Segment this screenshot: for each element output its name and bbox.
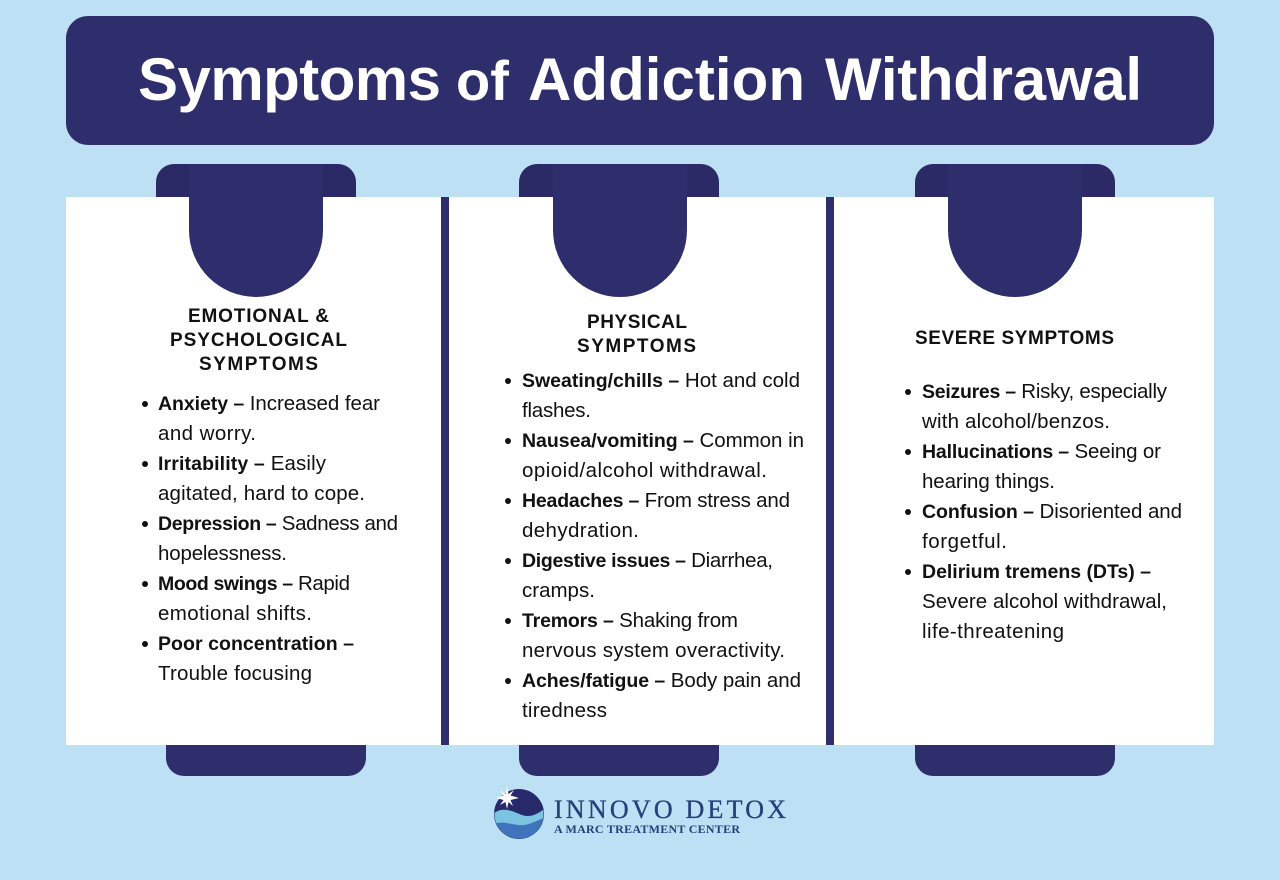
title: Withdrawal — [825, 46, 1142, 113]
item: anxiety — [142, 392, 380, 445]
item: tremors: nervous system overactivity. — [522, 639, 785, 662]
item: poor concentration — [142, 633, 354, 685]
title banner — [66, 16, 1214, 145]
item: delirium tremens: Severe alcohol withdrawal, — [922, 590, 1167, 613]
item: seizures: with alcohol/benzos. — [921, 410, 1110, 433]
item: digestive issues: cramps. — [522, 579, 595, 602]
item: delirium tremens: Delirium tremens (DTs) – — [922, 561, 1151, 583]
item: seizures — [905, 380, 1168, 433]
item: anxiety: Anxiety – Increased fear — [158, 392, 380, 415]
symptom list: emotional — [142, 392, 398, 685]
item: confusion — [905, 500, 1182, 553]
item: confusion: forgetful. — [922, 530, 1007, 553]
top tab: right — [915, 164, 1115, 197]
heading: physical symptoms: SYMPTOMS — [577, 336, 696, 357]
panel: severe symptoms — [905, 328, 1182, 643]
item: delirium tremens — [905, 561, 1167, 643]
item: mood swings — [142, 572, 350, 625]
title: Addiction — [528, 46, 805, 113]
item: sweating/chills — [505, 369, 800, 422]
heading: emotional and psychological symptoms — [170, 306, 347, 375]
top tab: middle — [519, 164, 719, 197]
item: sweating/chills: flashes. — [522, 399, 591, 422]
item: nausea/vomiting: Nausea/vomiting – Common in — [522, 429, 804, 452]
wordmark: INNOVO DETOX — [554, 795, 786, 824]
tagline: A MARC TREATMENT CENTER — [554, 822, 740, 836]
item: headaches: dehydration. — [522, 519, 639, 542]
item: aches/fatigue — [505, 669, 801, 722]
icon badge: right — [948, 164, 1082, 297]
title — [138, 46, 1142, 113]
title: Symptoms — [138, 46, 441, 113]
panel: emotional and psychological symptoms — [142, 306, 398, 685]
panel: white card background — [66, 197, 1214, 745]
heading: emotional and psychological symptoms: EMOTIONAL & — [188, 306, 329, 327]
item: poor concentration: Poor concentration – — [158, 633, 354, 655]
item: confusion: Confusion – Disoriented and — [922, 500, 1182, 523]
item: hallucinations: Hallucinations – Seeing or — [922, 440, 1161, 463]
item: irritability: Irritability – Easily — [158, 452, 327, 475]
item: seizures: Seizures – Risky, especially — [922, 380, 1168, 403]
item: poor concentration: Trouble focusing — [158, 662, 312, 685]
item: depression: hopelessness. — [158, 542, 287, 565]
item: nausea/vomiting — [505, 429, 804, 482]
panel: physical symptoms — [505, 312, 804, 722]
item: irritability: agitated, hard to cope. — [158, 482, 365, 505]
item: hallucinations: hearing things. — [922, 470, 1055, 493]
heading: emotional and psychological symptoms: PSYCHOLOGICAL — [170, 330, 347, 351]
symptom list: physical — [505, 369, 804, 722]
heading: physical symptoms: PHYSICAL — [587, 312, 687, 333]
item: headaches: Headaches – From stress and — [522, 489, 790, 512]
bottom tab: right — [915, 745, 1115, 776]
heading: physical symptoms — [577, 312, 696, 357]
item: digestive issues: Digestive issues – Diarrhea, — [522, 549, 773, 572]
icon: logo globe — [494, 786, 544, 840]
heading: emotional and psychological symptoms: SYMPTOMS — [199, 354, 318, 375]
item: delirium tremens: life-threatening — [922, 620, 1064, 643]
item: depression — [142, 512, 398, 565]
item: digestive issues — [505, 549, 773, 602]
item: aches/fatigue: tiredness — [522, 699, 607, 722]
item: sweating/chills: Sweating/chills – Hot and cold — [522, 369, 800, 392]
item: tremors — [505, 609, 785, 662]
icon badge: middle — [553, 164, 687, 297]
item: mood swings: Mood swings – Rapid — [158, 572, 350, 595]
item: hallucinations — [905, 440, 1161, 493]
item: irritability — [142, 452, 365, 505]
item: headaches — [505, 489, 790, 542]
item: aches/fatigue: Aches/fatigue – Body pain and — [522, 669, 801, 692]
title: of — [456, 49, 509, 112]
icon badge: left — [189, 164, 323, 297]
item: nausea/vomiting: opioid/alcohol withdrawal. — [522, 459, 767, 482]
item: anxiety: and worry. — [158, 422, 256, 445]
top tab: left — [156, 164, 356, 197]
heading: severe symptoms: SEVERE SYMPTOMS — [915, 328, 1114, 349]
logo: Innovo Detox — [494, 786, 786, 840]
bottom tab: middle — [519, 745, 719, 776]
item: mood swings: emotional shifts. — [158, 602, 312, 625]
item: tremors: Tremors – Shaking from — [522, 609, 738, 632]
symptom list: severe — [905, 380, 1182, 643]
item: depression: Depression – Sadness and — [158, 512, 398, 535]
bottom tab: left — [166, 745, 366, 776]
